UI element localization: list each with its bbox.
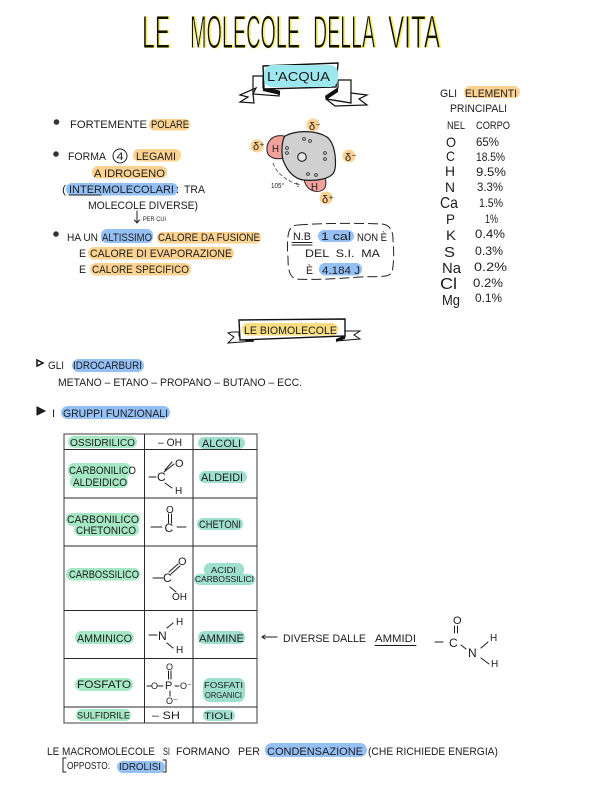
text block: hydrocarbons (37, 359, 302, 389)
row: carbonilico aldeidico (68, 458, 247, 497)
element list: S (444, 244, 455, 261)
hydrogen labels: H (311, 182, 318, 193)
element list (440, 134, 507, 309)
callout: N.B. calorie: N.B (293, 231, 311, 243)
heading: NEL (447, 120, 465, 132)
row: fosfato: O⁻ (166, 696, 178, 706)
heading: functional groups (37, 406, 170, 420)
diagram: amide group: C (449, 636, 458, 650)
text block: macromolecules: CONDENSAZIONE (267, 746, 363, 758)
text block: hydrocarbons: METANO – ETANO – PROPANO – BUTANO – ECC. (58, 377, 302, 389)
text block: macromolecules: OPPOSTO: (67, 761, 110, 772)
bullet: polar (54, 119, 189, 131)
partial charges: δ⁻ (345, 152, 357, 164)
row: carbonilico chetonico: O (166, 505, 174, 516)
bullet: hydrogen bonds: 4 (116, 151, 124, 163)
title: DELLA (314, 6, 377, 58)
bullet: polar: POLARE (151, 119, 189, 131)
callout: N.B. calorie: 1 cal (321, 231, 351, 243)
diagram: amide group: O (453, 615, 462, 627)
text block: macromolecules: (CHE RICHIEDE ENERGIA) (368, 746, 498, 758)
row: fosfato (75, 662, 245, 706)
element list: C (446, 148, 455, 164)
bullet: hydrogen bonds: TRA (184, 184, 206, 196)
banner: L'acqua: L'ACQUA (267, 69, 330, 84)
element list: K (446, 227, 457, 243)
row: sulfidrile: – SH (152, 710, 180, 722)
heading: functional groups: GRUPPI FUNZIONALI (63, 408, 168, 420)
element list: Ca (440, 195, 458, 212)
row: fosfato: P (165, 680, 172, 692)
diagram: amide group (435, 615, 498, 670)
heading: CORPO (476, 120, 510, 132)
partial charges: δ⁻ (309, 121, 321, 133)
bullet: hydrogen bonds: INTERMOLECOLARI (69, 184, 174, 196)
element list: H (445, 163, 455, 179)
partial charges (250, 118, 357, 206)
bullet: hydrogen bonds: PER CUI (143, 217, 166, 223)
row: fosfato: O (151, 681, 158, 691)
row: carbonilico chetonico: CARBONILICO (67, 514, 139, 526)
element list: 65% (476, 137, 499, 149)
row: carbonilico aldeidico: ALDEIDICO (73, 477, 127, 489)
bullet: hydrogen bonds: LEGAMI (136, 151, 176, 163)
element list: 1% (485, 214, 498, 226)
element list: N (445, 179, 455, 195)
table grid (64, 434, 257, 723)
banner: L'acqua (240, 63, 367, 106)
row: fosfato: FOSFATI (204, 680, 243, 690)
bullet: heat: CALORE DI EVAPORAZIONE (90, 248, 232, 260)
arrow: differs from amides (262, 635, 277, 639)
partial charges: δ⁺ (253, 141, 265, 153)
bullet: hydrogen bonds: ( (62, 184, 66, 196)
element list: P (446, 211, 455, 227)
bullet: hydrogen bonds: MOLECOLE DIVERSE) (88, 200, 198, 212)
title: DELLA (313, 6, 375, 58)
row: carbonilico chetonico (66, 505, 243, 537)
element list: 0.3% (475, 246, 503, 258)
row: sulfidrile: TIOLI (204, 711, 233, 721)
heading: functional groups: I (52, 408, 55, 420)
banner: Le biomolecole (228, 319, 360, 343)
banner: Le biomolecole: LE BIOMOLECOLE (244, 325, 337, 337)
heading: GLI (440, 88, 457, 100)
text block: macromolecules (47, 743, 498, 773)
text block: hydrocarbons: IDROCARBURI (73, 360, 142, 372)
row: carbossilico: CARBOSSILICI (195, 574, 254, 584)
panel: main elements in the body (440, 86, 520, 309)
text block: macromolecules: FORMANO (176, 746, 230, 758)
row: fosfato: O⁻ (180, 681, 192, 691)
row: carbonilico aldeidico: H (175, 486, 182, 497)
row: carbonilico chetonico: CHETONICO (76, 525, 136, 537)
hydrogen labels: H (272, 144, 279, 155)
callout: N.B. calorie: 4.184 J (322, 265, 360, 277)
oxygen atom (282, 132, 336, 180)
element list: 0.4% (475, 229, 505, 241)
heading (440, 86, 520, 132)
row: carbonilico aldeidico: O (175, 458, 184, 470)
text: different from amides: AMMIDI (375, 633, 416, 645)
title: MOLECOLE (192, 6, 302, 58)
text block: hydrocarbons: GLI (48, 360, 64, 372)
row: carbossilico: O (178, 556, 187, 568)
highlights (66, 119, 261, 276)
bullet: heat: CALORE SPECIFICO (92, 264, 189, 276)
row: ossidrilico: – OH (158, 437, 182, 449)
title: LE (142, 6, 170, 58)
heading: PRINCIPALI (450, 103, 507, 115)
callout: N.B. calorie (287, 223, 394, 279)
row: amminico: N (158, 629, 167, 643)
diagram: amide group: H (491, 659, 498, 670)
bullet: hydrogen bonds (53, 149, 206, 223)
callout: N.B. calorie: DEL S.I. MA (305, 248, 381, 260)
row: ossidrilico: OSSIDRILICO (70, 437, 135, 449)
bullet: heat (53, 231, 260, 276)
hydrogen shapes (267, 136, 326, 192)
element list: 3.3% (477, 182, 503, 194)
row: carbonilico chetonico: CHETONI (199, 519, 241, 531)
row: carbonilico chetonico: C (164, 521, 174, 535)
title: MOLECOLE (190, 6, 300, 58)
title: VITA (388, 6, 440, 58)
diagram: amide group: H (490, 633, 497, 644)
element list: 9.5% (476, 167, 506, 179)
text: different from amides (283, 633, 416, 646)
row: sulfidrile: SULFIDRILE (77, 710, 130, 720)
title: VITA (390, 6, 442, 58)
row: ossidrilico (68, 436, 245, 450)
row: fosfato: ORGANICI (205, 690, 242, 700)
element list: Na (442, 260, 462, 277)
bullet: heat: HA UN (67, 232, 98, 244)
row: carbonilico aldeidico: ALDEIDI (201, 472, 243, 484)
bullet: heat: E (79, 264, 86, 276)
row: carbossilico: C (163, 571, 172, 585)
bullet: polar: FORTEMENTE (70, 119, 147, 131)
callout: N.B. calorie: NON È (357, 231, 387, 244)
row: sulfidrile (76, 709, 235, 722)
bullet: heat: CALORE DA FUSIONE (158, 232, 260, 244)
element list: 18.5% (476, 152, 505, 164)
text block: macromolecules: LE MACROMOLECOLE (47, 746, 155, 758)
partial charges: δ⁺ (322, 194, 334, 206)
bullet: hydrogen bonds: : (176, 184, 179, 196)
element list: 0.2% (473, 278, 503, 290)
element list: 1.5% (479, 198, 503, 210)
element list: O (446, 134, 456, 150)
row: carbonilico aldeidico: CARBONILICO (69, 465, 136, 477)
element list: 0.1% (475, 293, 502, 305)
text block: macromolecules: PER (238, 746, 260, 758)
table: functional groups (64, 434, 257, 723)
bond angle: 105° (271, 182, 284, 190)
row: carbossilico: CARBOSSILICO (69, 569, 139, 581)
element list: Cl (440, 276, 457, 293)
diagram: amide group: N (468, 646, 477, 660)
bullet: hydrogen bonds: A IDROGENO (94, 168, 165, 180)
row: carbossilico (66, 556, 255, 603)
row: amminico: AMMINE (199, 633, 244, 645)
text block: macromolecules: SI (163, 746, 170, 758)
row: amminico: H (176, 645, 183, 656)
element list: Mg (442, 292, 460, 309)
bullet: hydrogen bonds: FORMA (68, 151, 107, 163)
bullet: heat: ALTISSIMO (102, 232, 152, 244)
row: carbossilico: OH (172, 592, 187, 603)
row: amminico: AMMINICO (77, 633, 132, 645)
row: fosfato: O (166, 662, 173, 672)
row: ossidrilico: ALCOLI (202, 438, 241, 450)
row: carbossilico: ACIDI (211, 565, 236, 575)
title: LE (144, 6, 172, 58)
row: fosfato: FOSFATO (77, 679, 131, 691)
row: amminico: H (176, 617, 183, 628)
callout: N.B. calorie: È (306, 264, 313, 277)
hydrogen labels (272, 144, 318, 193)
row: amminico (75, 617, 245, 656)
element list: 0.2% (474, 262, 507, 274)
diagram: water molecule (250, 118, 357, 206)
row: carbonilico aldeidico: C (157, 470, 166, 484)
text block: macromolecules: IDROLISI (119, 762, 161, 773)
text block: water properties (53, 119, 261, 276)
text: different from amides: DIVERSE DALLE (283, 633, 366, 645)
bullet: heat: E (79, 248, 86, 260)
heading: ELEMENTI (465, 88, 517, 100)
